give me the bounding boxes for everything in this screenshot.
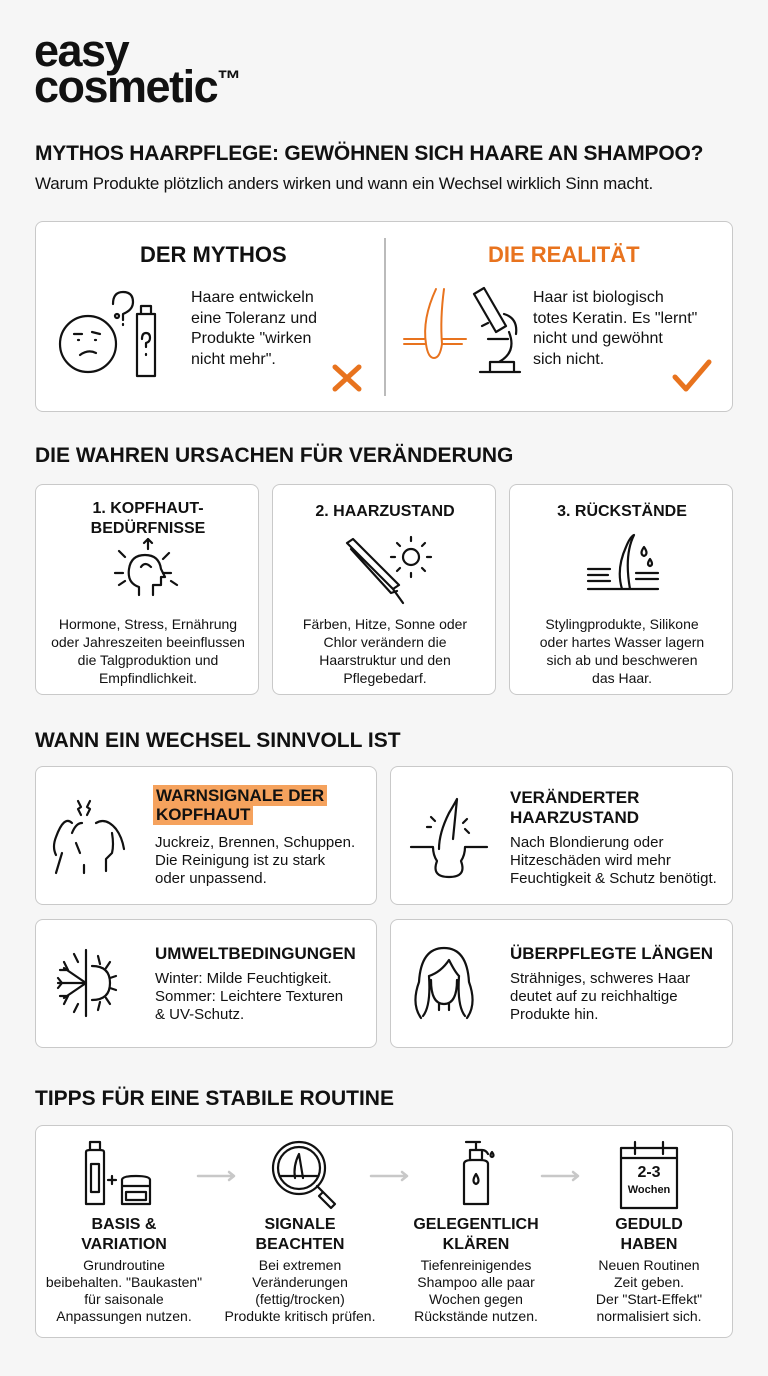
step 3 text: Shampoo alle paar bbox=[417, 1274, 535, 1290]
icon: bottle plus jar bbox=[84, 1140, 152, 1206]
panel: veraenderter haarzustand: Feuchtigkeit & Schutz benötigt. bbox=[510, 870, 717, 887]
panel: kopfhaut: oder Jahreszeiten beeinflussen bbox=[51, 634, 245, 650]
text: myth: Haare entwickeln bbox=[191, 289, 314, 306]
step 4 text: normalisiert sich. bbox=[596, 1308, 702, 1324]
panel: veraenderter haarzustand bbox=[390, 766, 733, 905]
panel: veraenderter haarzustand: VERÄNDERTER bbox=[510, 788, 639, 807]
text: reality: Haar ist biologisch bbox=[533, 289, 664, 306]
panel: warnsignale: Juckreiz, Brennen, Schuppen. bbox=[155, 834, 355, 851]
text: reality bbox=[533, 289, 697, 368]
step 2 text: Produkte kritisch prüfen. bbox=[225, 1308, 375, 1324]
text: myth: nicht mehr". bbox=[191, 350, 276, 368]
step 4 text: Neuen Routinen bbox=[598, 1257, 700, 1273]
heading: ursachen: DIE WAHREN URSACHEN FÜR VERÄNDERUNG bbox=[35, 444, 513, 467]
step 3 text: Wochen gegen bbox=[429, 1291, 523, 1307]
icon: calendar 2-3 weeks: Wochen bbox=[628, 1184, 670, 1196]
step 3 text: KLÄREN bbox=[443, 1236, 509, 1253]
step 3 text: GELEGENTLICH bbox=[413, 1216, 539, 1233]
panel: umweltbedingungen bbox=[35, 919, 377, 1048]
logo: cosmetic™ bbox=[34, 61, 240, 112]
panel: ueberpflegte laengen: Produkte hin. bbox=[510, 1006, 598, 1023]
step 1 text: VARIATION bbox=[81, 1236, 167, 1253]
arrow bbox=[370, 1170, 408, 1182]
step 3 text: Rückstände nutzen. bbox=[414, 1308, 538, 1324]
panel: kopfhaut: Empfindlichkeit. bbox=[99, 670, 197, 686]
panel: kopfhaut: BEDÜRFNISSE bbox=[91, 520, 205, 537]
icon: damaged hair follicle bbox=[410, 798, 488, 878]
panel: kopfhaut: Hormone, Stress, Ernährung bbox=[59, 616, 237, 632]
panel: ueberpflegte laengen bbox=[390, 919, 733, 1048]
arrow bbox=[540, 1170, 580, 1182]
heading: die realitaet: DIE REALITÄT bbox=[488, 242, 640, 267]
step 2 text: BEACHTEN bbox=[256, 1236, 344, 1253]
logo: easy bbox=[34, 25, 128, 76]
icon: confused face and bottle bbox=[58, 290, 156, 378]
step 1 text: beibehalten. "Baukasten" bbox=[46, 1274, 202, 1290]
step 2 text: SIGNALE bbox=[264, 1216, 336, 1233]
step 1 text: Anpassungen nutzen. bbox=[56, 1308, 192, 1324]
panel: ueberpflegte laengen: ÜBERPFLEGTE LÄNGEN bbox=[510, 944, 713, 963]
step 3 text bbox=[413, 1216, 539, 1324]
step 4 text: Der "Start-Effekt" bbox=[596, 1291, 702, 1307]
panel: warnsignale: Die Reinigung ist zu stark bbox=[155, 852, 325, 869]
icon: orange check bbox=[672, 360, 712, 392]
icon: head arrows bbox=[114, 538, 178, 596]
step 3 text: Tiefenreinigendes bbox=[421, 1257, 531, 1273]
panel: haarzustand: 2. HAARZUSTAND bbox=[315, 503, 455, 520]
step 2 text: Veränderungen bbox=[252, 1274, 348, 1290]
text: myth: eine Toleranz und bbox=[191, 310, 317, 326]
heading: tipps: TIPPS FÜR EINE STABILE ROUTINE bbox=[35, 1087, 394, 1110]
panel: veraenderter haarzustand: Hitzeschäden wird mehr bbox=[510, 852, 671, 869]
panel: myth vs reality bbox=[35, 221, 733, 412]
icon: hands on head bbox=[52, 800, 126, 874]
panel: veraenderter haarzustand: Nach Blondierung oder bbox=[510, 834, 663, 851]
panel: rueckstaende: oder hartes Wasser lagern bbox=[540, 634, 704, 650]
icon: calendar 2-3 weeks: 2-3 bbox=[637, 1164, 661, 1181]
panel: rueckstaende: 3. RÜCKSTÄNDE bbox=[557, 503, 687, 520]
text: reality: totes Keratin. Es "lernt" bbox=[533, 310, 697, 326]
text: reality: nicht und gewöhnt bbox=[533, 330, 663, 347]
panel: kopfhaut bbox=[35, 484, 259, 695]
panel: umweltbedingungen: & UV-Schutz. bbox=[155, 1006, 244, 1023]
panel: ueberpflegte laengen: Strähniges, schweres Haar bbox=[510, 970, 690, 987]
step 1 text: Grundroutine bbox=[83, 1257, 165, 1273]
step 2 text bbox=[225, 1216, 375, 1324]
icon: hair with drops bbox=[586, 534, 660, 590]
panel: warnsignale bbox=[35, 766, 377, 905]
icon: orange x bbox=[332, 364, 362, 392]
highlight title: KOPFHAUT bbox=[156, 805, 250, 824]
icon: woman with hair bbox=[414, 946, 474, 1020]
logo bbox=[34, 25, 240, 112]
highlight title: WARNSIGNALE DER bbox=[156, 786, 324, 805]
panel: haarzustand: Färben, Hitze, Sonne oder bbox=[303, 616, 467, 632]
subtitle: Warum Produkte plötzlich anders wirken und wann ein Wechsel wirklich Sinn macht. bbox=[35, 174, 653, 193]
step 1 text bbox=[46, 1216, 202, 1324]
icon: snowflake and sun bbox=[56, 948, 118, 1018]
panel: rueckstaende bbox=[509, 484, 733, 695]
panel: routine tips bbox=[35, 1125, 733, 1338]
step 4 text: HABEN bbox=[621, 1236, 677, 1253]
text: myth: Produkte "wirken bbox=[191, 330, 311, 347]
panel: umweltbedingungen: UMWELTBEDINGUNGEN bbox=[155, 944, 356, 963]
heading: wechsel: WANN EIN WECHSEL SINNVOLL IST bbox=[35, 729, 401, 752]
icon: straightener and sun bbox=[346, 536, 432, 604]
step 2 text: (fettig/trocken) bbox=[255, 1291, 345, 1307]
icon: magnifier with hair bbox=[272, 1140, 336, 1210]
panel: warnsignale: oder unpassend. bbox=[155, 870, 267, 887]
title: MYTHOS HAARPFLEGE: GEWÖHNEN SICH HAARE AN SHAMPOO? bbox=[35, 142, 703, 165]
heading: der mythos: DER MYTHOS bbox=[140, 242, 287, 267]
panel: rueckstaende: das Haar. bbox=[592, 670, 652, 686]
panel: haarzustand: Haarstruktur und den bbox=[319, 652, 451, 668]
step 4 text bbox=[596, 1216, 702, 1324]
step 2 text: Bei extremen bbox=[259, 1257, 341, 1273]
step 1 text: für saisonale bbox=[84, 1291, 164, 1307]
icon: hair and microscope bbox=[403, 286, 522, 374]
panel: rueckstaende: Stylingprodukte, Silikone bbox=[545, 616, 699, 632]
panel: umweltbedingungen: Winter: Milde Feuchtigkeit. bbox=[155, 970, 332, 987]
panel: ueberpflegte laengen: deutet auf zu reichhaltige bbox=[510, 988, 678, 1005]
step 4 text: Zeit geben. bbox=[614, 1274, 684, 1290]
highlight title bbox=[153, 785, 327, 825]
panel: haarzustand bbox=[272, 484, 496, 695]
arrow bbox=[196, 1170, 236, 1182]
text: myth bbox=[191, 289, 317, 368]
icon: pump bottle bbox=[462, 1140, 495, 1206]
panel: kopfhaut: 1. KOPFHAUT- bbox=[92, 500, 204, 517]
panel: kopfhaut: die Talgproduktion und bbox=[78, 652, 218, 668]
step 4 text: GEDULD bbox=[615, 1216, 683, 1233]
panel: rueckstaende: sich ab und beschweren bbox=[546, 652, 698, 668]
text: reality: sich nicht. bbox=[533, 350, 604, 368]
step 1 text: BASIS & bbox=[92, 1216, 156, 1233]
icon: calendar 2-3 weeks bbox=[620, 1140, 678, 1210]
panel: haarzustand: Chlor verändern die bbox=[324, 634, 446, 650]
panel: umweltbedingungen: Sommer: Leichtere Texturen bbox=[155, 988, 343, 1005]
panel: haarzustand: Pflegebedarf. bbox=[343, 670, 427, 686]
panel: veraenderter haarzustand: HAARZUSTAND bbox=[510, 808, 639, 827]
